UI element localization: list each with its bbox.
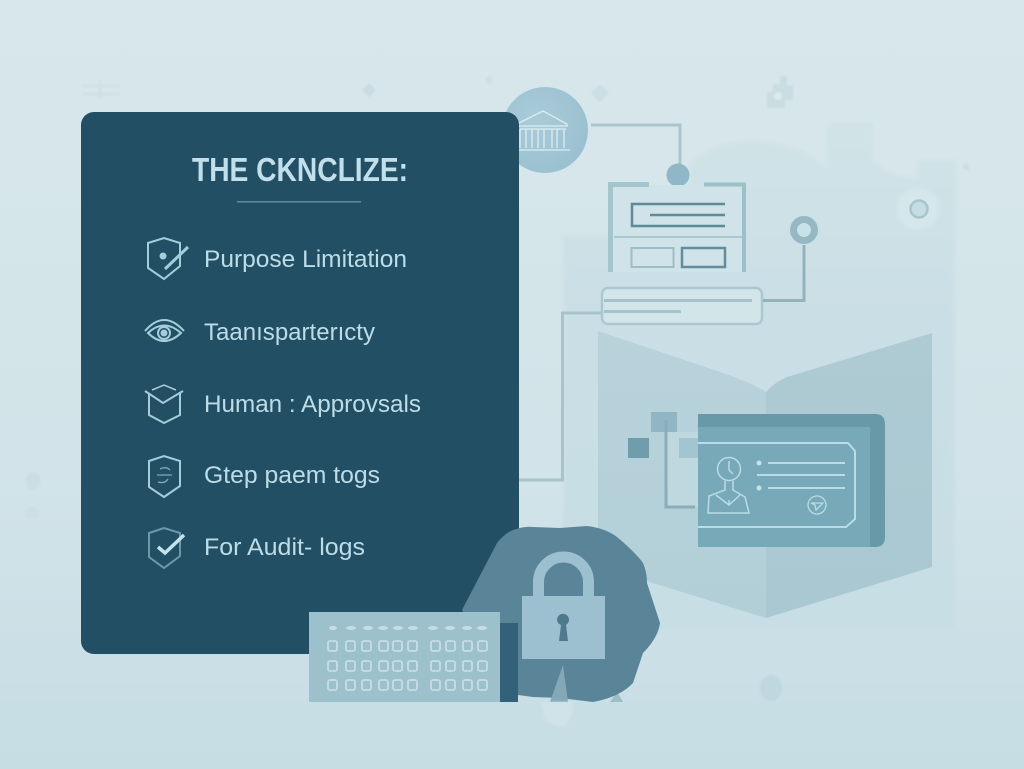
decoration: puzzle icon — [767, 76, 793, 108]
title: THE CKNCLIZE: — [192, 151, 408, 188]
bar line top — [604, 299, 752, 302]
divider — [614, 236, 742, 238]
card back — [698, 414, 885, 547]
square top — [651, 412, 677, 432]
decoration: diamond right — [591, 84, 609, 102]
item: transparency — [145, 319, 375, 346]
square left — [628, 438, 649, 458]
profile card — [698, 414, 885, 547]
left page — [598, 331, 766, 618]
keyboard side shadow — [500, 623, 518, 702]
item: step logs — [149, 456, 380, 497]
shackle — [538, 557, 588, 598]
bullet bottom — [756, 486, 762, 490]
icon: envelope shield — [145, 385, 183, 423]
decoration: diamond left — [362, 83, 376, 97]
connector: institution to form — [591, 125, 680, 165]
detail lines — [757, 463, 845, 488]
triangle base right — [610, 692, 623, 702]
item: audit logs — [149, 528, 365, 568]
header field — [632, 204, 725, 226]
open book — [598, 331, 932, 618]
right page — [766, 333, 932, 618]
square right — [679, 438, 699, 458]
small squares and connector — [628, 412, 699, 507]
pin ring — [794, 220, 814, 240]
label: Purpose Limitation — [204, 246, 407, 273]
right small box — [682, 248, 725, 267]
card outline — [698, 443, 855, 527]
keyboard body — [309, 612, 500, 702]
icon: shield with arrows — [149, 456, 180, 497]
right bracket — [704, 184, 744, 272]
connector dot — [666, 164, 690, 186]
bar line bottom — [604, 310, 681, 313]
temple — [510, 111, 570, 150]
gear icon — [897, 188, 939, 230]
form body tint — [610, 185, 744, 272]
checklist panel — [81, 112, 519, 654]
card front — [698, 427, 870, 547]
key grid — [328, 641, 487, 690]
label: Taanısparterıcty — [204, 319, 375, 346]
form diagram — [610, 184, 744, 272]
decoration: puzzle highlight — [774, 92, 782, 100]
left small box — [632, 248, 674, 267]
decoration: left smudge upper — [26, 472, 40, 490]
lock body — [522, 596, 605, 659]
decoration: bottom smudge — [760, 675, 782, 701]
bottom smudge — [541, 702, 573, 726]
bullet top — [756, 460, 762, 466]
padlock group — [462, 526, 660, 702]
light connector area — [667, 432, 698, 507]
item: human approvals — [145, 385, 421, 423]
panel background — [81, 112, 519, 654]
decoration: top-left sign — [83, 80, 120, 99]
clock ring — [910, 200, 928, 218]
dark blob — [462, 526, 660, 702]
top key row — [329, 626, 487, 630]
person icon — [708, 458, 749, 513]
text bar — [602, 288, 762, 324]
circle — [502, 87, 588, 173]
connector: bar to card panel — [519, 313, 602, 480]
item: purpose limitation — [148, 238, 407, 279]
background decorations — [25, 76, 969, 701]
icon: eye — [145, 320, 184, 341]
decoration: far right dot — [963, 164, 969, 170]
connector line — [666, 420, 695, 507]
decoration: small dot — [485, 76, 493, 84]
left bracket — [610, 184, 649, 272]
gear backdrop — [897, 188, 939, 230]
decoration: left smudge lower — [25, 507, 39, 519]
label: Human : Approvsals — [204, 391, 421, 418]
bar outline — [602, 288, 762, 324]
label: For Audit- logs — [204, 534, 365, 561]
cloud shape — [563, 123, 955, 630]
institution circle icon — [502, 87, 588, 173]
label: Gtep paem togs — [204, 462, 380, 489]
background building silhouette — [563, 123, 955, 630]
icon: shield with check — [149, 528, 184, 568]
lower light wedge — [550, 665, 568, 702]
smudge — [541, 702, 573, 726]
keyhole — [557, 614, 569, 641]
keyboard — [309, 612, 518, 702]
icon: shield with pen — [148, 238, 188, 279]
title divider — [237, 201, 361, 202]
map pin connector — [763, 220, 814, 300]
connector line — [763, 245, 804, 300]
badge icon — [808, 496, 826, 514]
